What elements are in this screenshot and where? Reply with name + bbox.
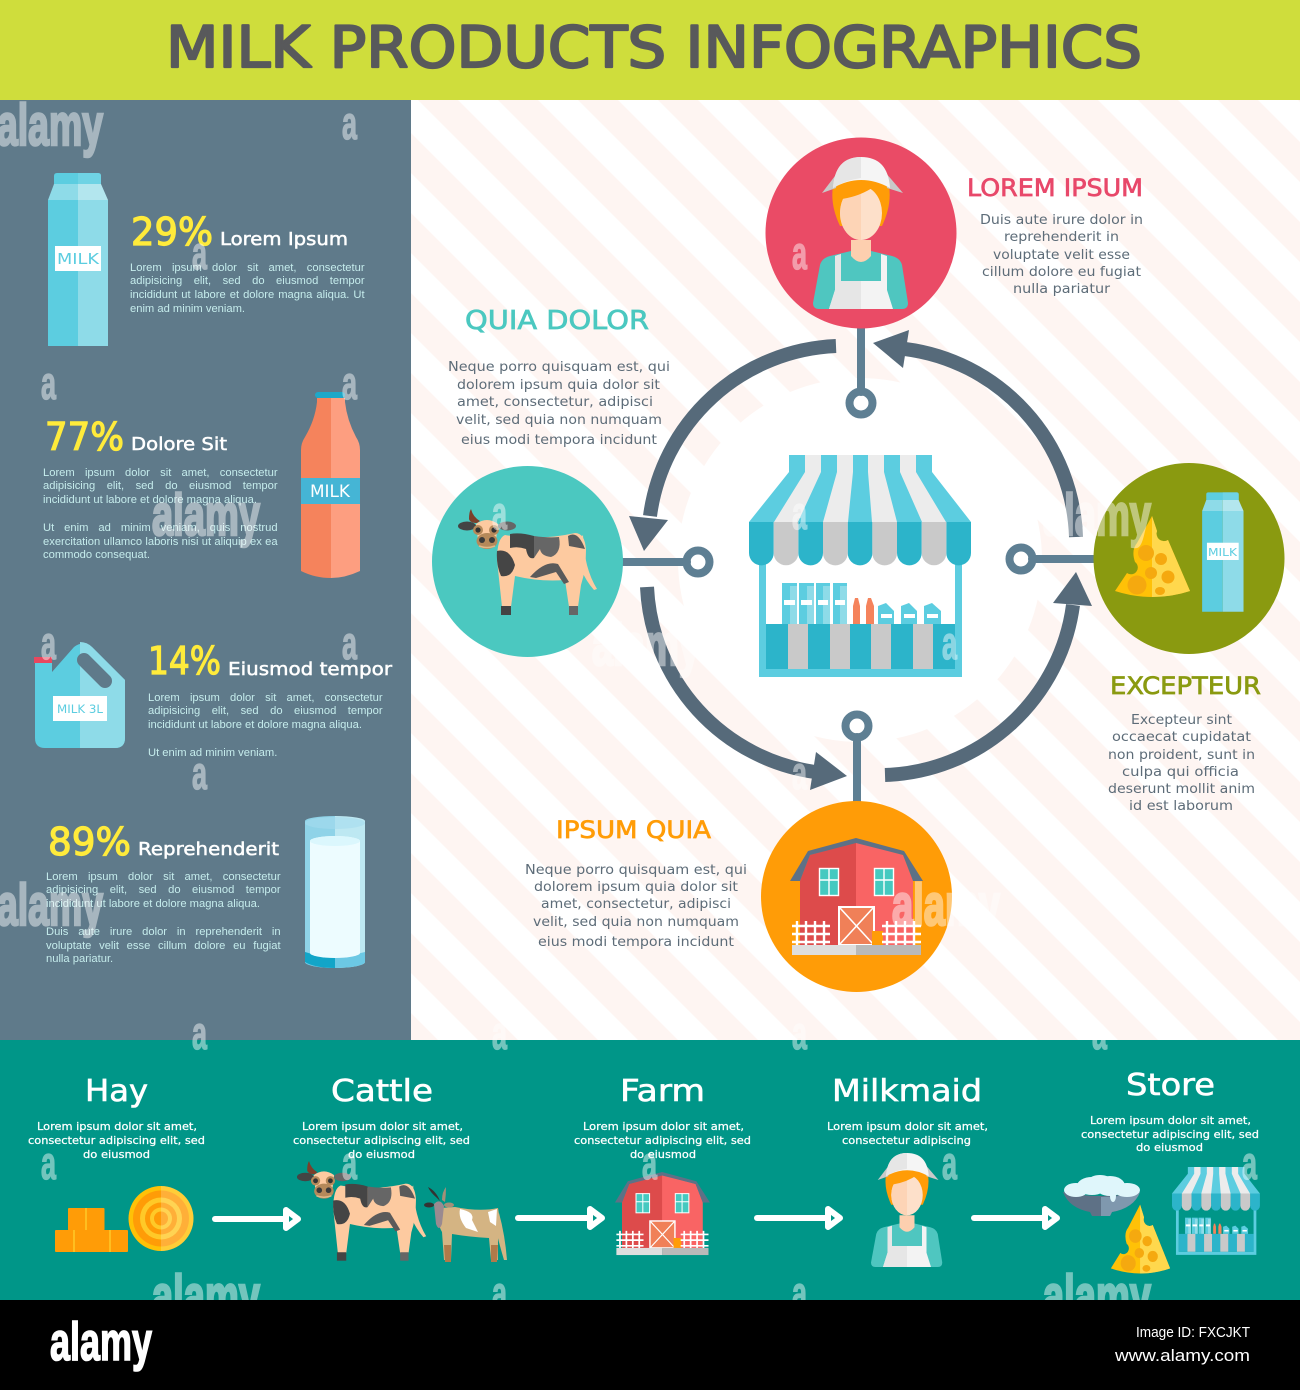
step: hay: consectetur adipiscing elit, sed [28,1135,205,1147]
watermarks: a [492,1267,507,1319]
watermarks: a [192,747,207,799]
icon: milk jug [34,642,125,748]
bottom process band [0,1040,1300,1300]
stat: 14%: Lorem ipsum dolor sit amet, consectetur [148,692,383,704]
stat: 77%: exercitation ullamco laboris nisi ut aliquip ex ea [43,536,278,548]
step: store: Lorem ipsum dolor sit amet, [1090,1115,1251,1127]
stat: 77%: incididunt ut labore et dolore magna aliqua. [43,494,257,506]
stat: 89%: 89% [48,820,131,864]
arrow: farm to milkmaid [757,1209,840,1227]
step: farm [574,1074,751,1255]
circle: cheese and milk [1094,463,1284,654]
stat: 89%: adipisicing elit, sed do eiusmod tempor [46,884,281,896]
stat: 29%: incididunt ut labore et dolore magna aliqua. Ut [130,289,365,301]
stat: 77%: adipisicing elit, sed do eiusmod tempor [43,480,278,492]
step: farm: Farm [620,1074,705,1109]
watermarks: a [342,97,357,149]
watermarks: alamy [1043,1264,1151,1329]
text block: ipsum quia: amet, consectetur, adipisci [541,897,731,912]
text block: excepteur: occaecat cupidatat [1112,730,1251,745]
watermarks: a [1242,1137,1257,1189]
step: farm: do eiusmod [630,1149,696,1161]
circle: cheese and milk: MILK [1208,547,1238,559]
stat: 77%: Ut enim ad minim veniam, quis nostrud [43,522,278,534]
step: milkmaid: Lorem ipsum dolor sit amet, [827,1121,988,1133]
watermarks: alamy [152,483,260,548]
text block: ipsum quia: eius modi tempora incidunt [538,935,734,950]
text block: lorem ipsum: LOREM IPSUM [967,174,1143,202]
watermarks: a [41,1137,56,1189]
watermarks: a [41,617,56,669]
watermarks: a [942,617,957,669]
stat: 14%: adipisicing elit, sed do eiusmod tempor [148,705,383,717]
text block: ipsum quia: Neque porro quisquam est, qui [525,863,747,878]
icon: bowl of curds [1063,1175,1140,1216]
step: cattle: Lorem ipsum dolor sit amet, [302,1121,463,1133]
icon: hay bales [55,1186,194,1252]
stat: 89%: incididunt ut labore et dolore magna aliqua. [46,898,260,910]
text block: quia dolor: amet, consectetur, adipisci [457,395,653,410]
icon: cheese [1111,1205,1170,1273]
stat: 14%: Ut enim ad minim veniam. [148,747,277,759]
text block: quia dolor: Neque porro quisquam est, qui [448,360,670,375]
footer bar [0,1300,1300,1390]
step: farm: consectetur adipiscing elit, sed [574,1135,751,1147]
stat: 14% [148,639,393,767]
step: store: consectetur adipiscing elit, sed [1081,1129,1259,1141]
arrow: hay to cattle [215,1210,298,1228]
icon: small stall [1172,1167,1260,1255]
stat: 89%: voluptate velit esse cillum dolore eu fugiat [46,940,281,952]
footer image id: Image ID: FXCJKT [1136,1324,1250,1341]
text block: quia dolor: QUIA DOLOR [465,306,649,336]
watermarks: alamy [592,613,700,678]
stat: 29%: enim ad minim veniam. [130,303,245,315]
stat: 14%: Eiusmod tempor [228,659,393,680]
watermarks: a [192,227,207,279]
stat: 89% [46,820,286,971]
stat: 77% [43,415,283,567]
icon: barn [615,1172,710,1255]
circle: milkmaid [766,138,956,328]
watermarks: a [792,1267,807,1319]
step: milkmaid: consectetur adipiscing [842,1135,971,1147]
icon: milk stall [749,455,971,677]
text block: ipsum quia: dolorem ipsum quia dolor sit [534,880,738,895]
text block: ipsum quia: velit, sed quia non numquam [533,915,739,930]
watermarks: a [792,227,807,279]
step: cattle: consectetur adipiscing elit, sed [293,1135,470,1147]
watermarks: alamy [892,873,1000,938]
text block: lorem ipsum: nulla pariatur [1013,282,1111,297]
cycle arrows [629,330,1092,790]
text block: quia dolor: velit, sed quia non numquam [456,413,662,428]
watermarks: a [342,357,357,409]
watermarks: a [492,1007,507,1059]
text block: quia dolor: dolorem ipsum quia dolor sit [457,378,660,393]
stat: 77%: commodo consequat. [43,549,150,561]
watermarks: a [342,1137,357,1189]
stat: 14%: incididunt ut labore et dolore magna aliqua. [148,719,362,731]
watermarks: a [792,1007,807,1059]
icon: milk bottle [301,392,360,578]
step: milkmaid [827,1074,988,1267]
stat: 89%: Reprehenderit [138,839,279,860]
stat: 29%: 29% [131,210,213,254]
icon: milk carton [48,173,108,346]
striped main panel [411,100,1300,1040]
connector: bottom [846,714,868,803]
icon: milk jug: MILK 3L [57,702,104,716]
watermarks: a [342,617,357,669]
watermarks: alamy [1043,483,1151,548]
text block: excepteur: Excepteur sint [1131,713,1232,728]
icon: goat [424,1187,507,1262]
stat: 89%: nulla pariatur. [46,953,113,965]
watermarks: a [942,1137,957,1189]
stat: 29%: Lorem ipsum dolor sit amet, consectetur [130,262,365,274]
icon: milk carton: MILK [57,250,100,268]
step: hay: Hay [85,1074,148,1109]
connector: right [1010,548,1099,570]
step: store [1063,1068,1260,1273]
text block: excepteur: id est laborum [1129,799,1233,814]
watermarks: alamy [0,93,103,158]
connector: top [850,325,872,414]
text block: quia dolor [448,306,670,448]
watermarks: a [1092,1007,1107,1059]
footer logo: alamy [50,1312,152,1372]
connector: left [620,550,710,574]
icon: milk bottle: MILK [310,482,351,502]
text block: excepteur [1108,672,1261,814]
stat: 77%: 77% [45,415,124,459]
step: milkmaid: Milkmaid [832,1074,982,1109]
watermarks: alamy [152,1264,260,1329]
watermarks: a [192,1007,207,1059]
arrow: cattle to farm [518,1209,602,1227]
stat: 77%: Dolore Sit [131,434,227,455]
step: cattle: do eiusmod [348,1149,415,1161]
text block: excepteur: culpa qui officia [1122,765,1239,780]
watermarks: a [41,357,56,409]
text block: lorem ipsum [967,174,1143,297]
circle: barn [761,801,952,992]
stat: 89%: Lorem ipsum dolor sit amet, consectetur [46,871,281,883]
step: hay: do eiusmod [83,1149,150,1161]
text block: excepteur: deserunt mollit anim [1108,782,1255,797]
title: MILK PRODUCTS INFOGRAPHICS [166,15,1142,81]
footer url: www.alamy.com [1114,1346,1250,1365]
icon: cow [297,1161,426,1261]
text block: ipsum quia [525,816,747,950]
text block: lorem ipsum: voluptate velit esse [993,248,1130,263]
stat: 14%: 14% [148,639,221,683]
step: hay: Lorem ipsum dolor sit amet, [37,1121,197,1133]
watermarks: a [642,1137,657,1189]
stat: 29%: Lorem Ipsum [220,229,348,250]
icon: glass of milk [305,816,365,968]
arrow: milkmaid to store [974,1209,1057,1227]
text block: lorem ipsum: reprehenderit in [1004,230,1119,245]
step: store: Store [1126,1068,1215,1103]
stat: 29%: adipisicing elit, sed do eiusmod tempor [130,275,365,287]
step: cattle [293,1074,470,1261]
icon: milkmaid [871,1153,942,1267]
circle: cow [432,466,623,657]
step: farm: Lorem ipsum dolor sit amet, [583,1121,744,1133]
step: hay [28,1074,205,1252]
text block: excepteur: non proident, sunt in [1108,748,1255,763]
left statistics panel [0,100,411,1040]
stat: 77%: Lorem ipsum dolor sit amet, consectetur [43,467,278,479]
step: cattle: Cattle [331,1074,433,1109]
watermarks: a [492,487,507,539]
watermarks: a [792,487,807,539]
text block: quia dolor: eius modi tempora incidunt [461,433,657,448]
text block: lorem ipsum: cillum dolore eu fugiat [982,265,1141,280]
stat: 89%: Duis aute irure dolor in reprehenderit in [46,926,281,938]
step: store: do eiusmod [1136,1142,1203,1154]
text block: excepteur: EXCEPTEUR [1110,672,1261,700]
text block: lorem ipsum: Duis aute irure dolor in [980,213,1143,228]
watermarks: a [792,747,807,799]
stat: 29% [130,210,370,322]
header band [0,0,1300,100]
text block: ipsum quia: IPSUM QUIA [556,816,712,844]
watermarks: alamy [0,873,103,938]
